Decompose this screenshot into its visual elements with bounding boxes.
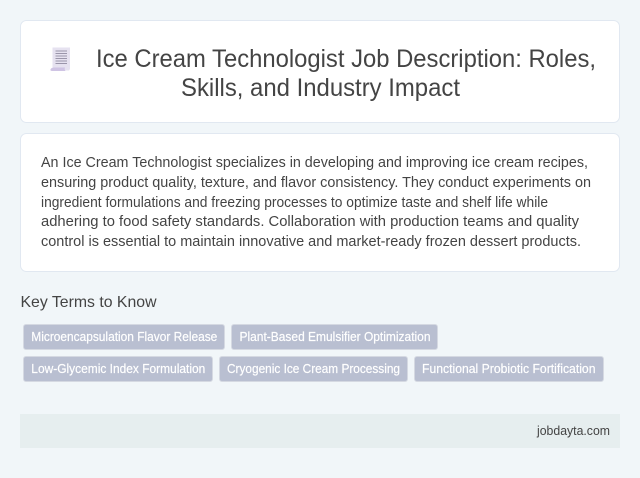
title: Skills, and Industry Impact: [181, 74, 460, 102]
description text: control is essential to maintain innovative and market-ready frozen dessert products.: [41, 234, 581, 250]
description text: [41, 155, 591, 250]
tag: Microencapsulation Flavor Release: Microencapsulation Flavor Release: [31, 329, 217, 344]
description text: An Ice Cream Technologist specializes in developing and improving ice cream recipes,: [41, 155, 588, 171]
panel: header: [20, 20, 620, 122]
tag: Plant-Based Emulsifier Optimization: Plant-Based Emulsifier Optimization: [240, 329, 430, 344]
description text: ensuring product quality, texture, and flavor consistency. They conduct experiments on: [41, 175, 591, 191]
title: Ice Cream Technologist Job Description: Roles,: [96, 45, 596, 73]
tag: Plant-Based Emulsifier Optimization: [232, 324, 438, 350]
description text: ingredient formulations and freezing processes to optimize taste and shelf life while: [41, 195, 548, 211]
footer: [20, 414, 620, 448]
title: [96, 45, 596, 102]
description text: adhering to food safety standards. Collaboration with production teams and quality: [41, 214, 580, 230]
tag: Cryogenic Ice Cream Processing: Cryogenic Ice Cream Processing: [227, 361, 400, 376]
heading: key terms: Key Terms to Know: [20, 294, 157, 311]
panel: description: [20, 134, 620, 272]
tag: Low-Glycemic Index Formulation: Low-Glycemic Index Formulation: [31, 361, 205, 376]
tag: Microencapsulation Flavor Release: [24, 324, 224, 350]
icon: document scroll: [50, 48, 70, 71]
tag: Low-Glycemic Index Formulation: [24, 356, 212, 382]
tag: Cryogenic Ice Cream Processing: [220, 356, 408, 382]
tag: Functional Probiotic Fortification: [414, 356, 604, 382]
footer site name: jobdayta.com: [536, 424, 610, 438]
tag: Functional Probiotic Fortification: Functional Probiotic Fortification: [422, 361, 596, 376]
